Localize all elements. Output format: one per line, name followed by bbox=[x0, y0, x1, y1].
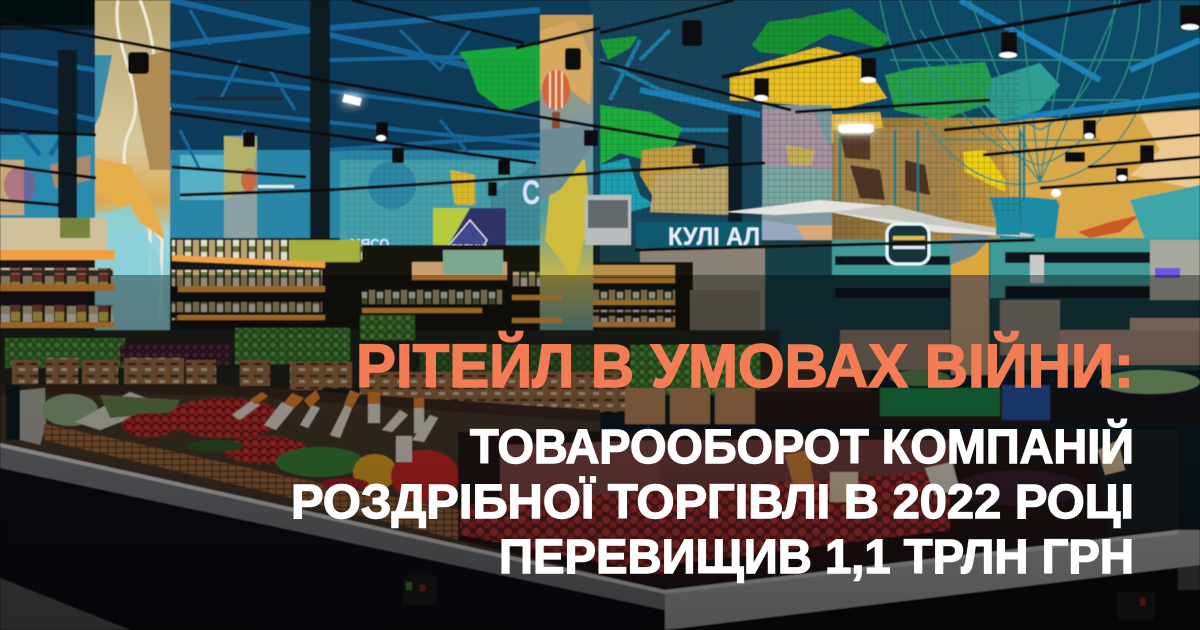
neon signs bbox=[350, 174, 1020, 264]
sign: Premia bbox=[433, 208, 506, 278]
glass produce case left bbox=[0, 385, 600, 585]
neon signs: С bbox=[522, 174, 540, 212]
floor bbox=[0, 578, 130, 630]
counter rail bbox=[0, 443, 665, 610]
shop goods right bbox=[690, 290, 1200, 370]
glass fridge right with strawberries bbox=[458, 430, 1178, 590]
subtitle line 1: ТОВАРООБОРОТ КОМПАНІЙ bbox=[470, 419, 1134, 474]
rear shop area bbox=[600, 238, 1200, 370]
lights bbox=[195, 24, 1199, 197]
neon signs: МЯСО bbox=[350, 236, 389, 251]
control panels bbox=[403, 575, 1154, 620]
headline bbox=[291, 331, 1134, 584]
neon signs: КУЛІ АЛ bbox=[668, 223, 760, 251]
sign: Premia: ПРЕМІЯ bbox=[451, 243, 487, 253]
refrigerated display box bbox=[585, 195, 631, 245]
green crates and vegetables bbox=[755, 370, 1200, 425]
store shelves bbox=[0, 218, 693, 355]
dark overlay on lower photo bbox=[0, 275, 1200, 630]
subtitle line 3: ПЕРЕВИЩИВ 1,1 ТРЛН ГРН bbox=[499, 531, 1134, 584]
spotlights bbox=[128, 5, 1200, 196]
steel beams bbox=[0, 0, 1200, 170]
black posts bbox=[58, 0, 742, 275]
dark base of counter bbox=[0, 430, 665, 630]
track rails bbox=[0, 0, 1200, 250]
fishing net bbox=[840, 0, 1160, 240]
map column 4 with mesh bbox=[762, 105, 832, 350]
map column 3 with balloon bbox=[540, 15, 593, 340]
map shapes on wall bbox=[345, 0, 1200, 250]
orange tag tops bbox=[250, 390, 424, 408]
white canopy bbox=[725, 200, 1035, 237]
heading: orange title: РІТЕЙЛ В УМОВАХ ВІЙНИ: bbox=[356, 331, 1134, 400]
price tags bbox=[232, 395, 438, 462]
decorated map column 1 bbox=[95, 0, 170, 345]
map column 2 bbox=[224, 136, 257, 240]
map column 5 bbox=[951, 235, 989, 375]
herb pots row bbox=[0, 315, 780, 424]
subtitle line 2: РОЗДРІБНОЇ ТОРГІВЛІ В 2022 РОЦІ bbox=[291, 476, 1134, 529]
